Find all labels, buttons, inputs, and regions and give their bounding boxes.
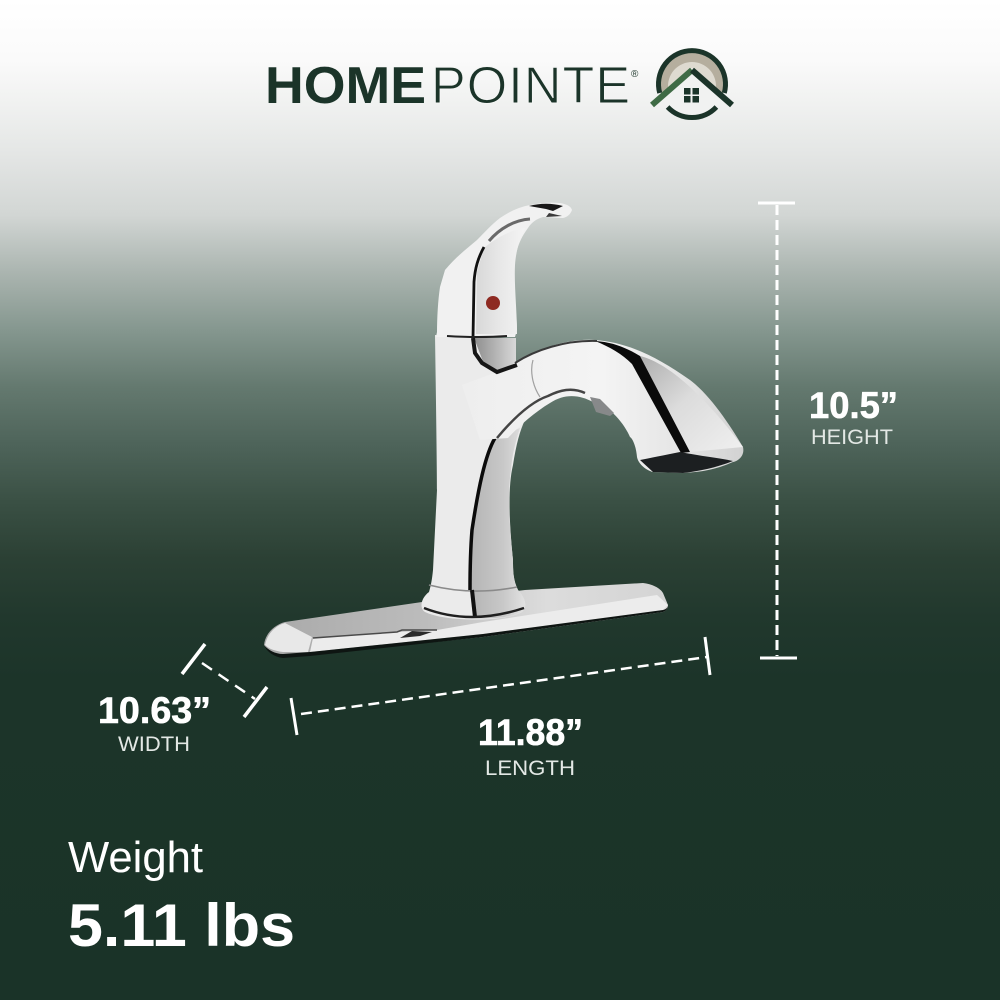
weight label: Weight bbox=[68, 833, 203, 882]
width dimension bbox=[182, 644, 267, 717]
weight value: 5.11 lbs bbox=[68, 892, 295, 959]
label: width bbox=[98, 690, 211, 756]
faucet handle collar bbox=[474, 338, 516, 372]
icon: house in circle bbox=[648, 51, 736, 126]
faucet bbox=[264, 203, 743, 658]
logo wordmark HOME: HOME bbox=[265, 57, 426, 115]
red indicator bbox=[486, 296, 500, 310]
logo registered mark: ® bbox=[631, 69, 639, 80]
faucet column bbox=[422, 335, 525, 620]
length dimension bbox=[291, 637, 710, 735]
label: length: 11.88” bbox=[478, 712, 583, 753]
label: length bbox=[478, 712, 583, 780]
label: height: HEIGHT bbox=[811, 426, 893, 449]
faucet base plate bbox=[264, 583, 668, 658]
height dimension bbox=[758, 203, 797, 658]
logo wordmark POINTE: POINTE bbox=[431, 57, 630, 115]
label: width: 10.63” bbox=[98, 690, 211, 731]
label: length: LENGTH bbox=[485, 757, 575, 780]
label: width: WIDTH bbox=[118, 733, 190, 756]
weight block bbox=[68, 833, 295, 959]
faucet handle bbox=[436, 203, 572, 372]
label: height: 10.5” bbox=[809, 385, 898, 426]
logo bbox=[265, 51, 736, 126]
label: height bbox=[809, 385, 898, 449]
faucet spout bbox=[462, 340, 743, 473]
